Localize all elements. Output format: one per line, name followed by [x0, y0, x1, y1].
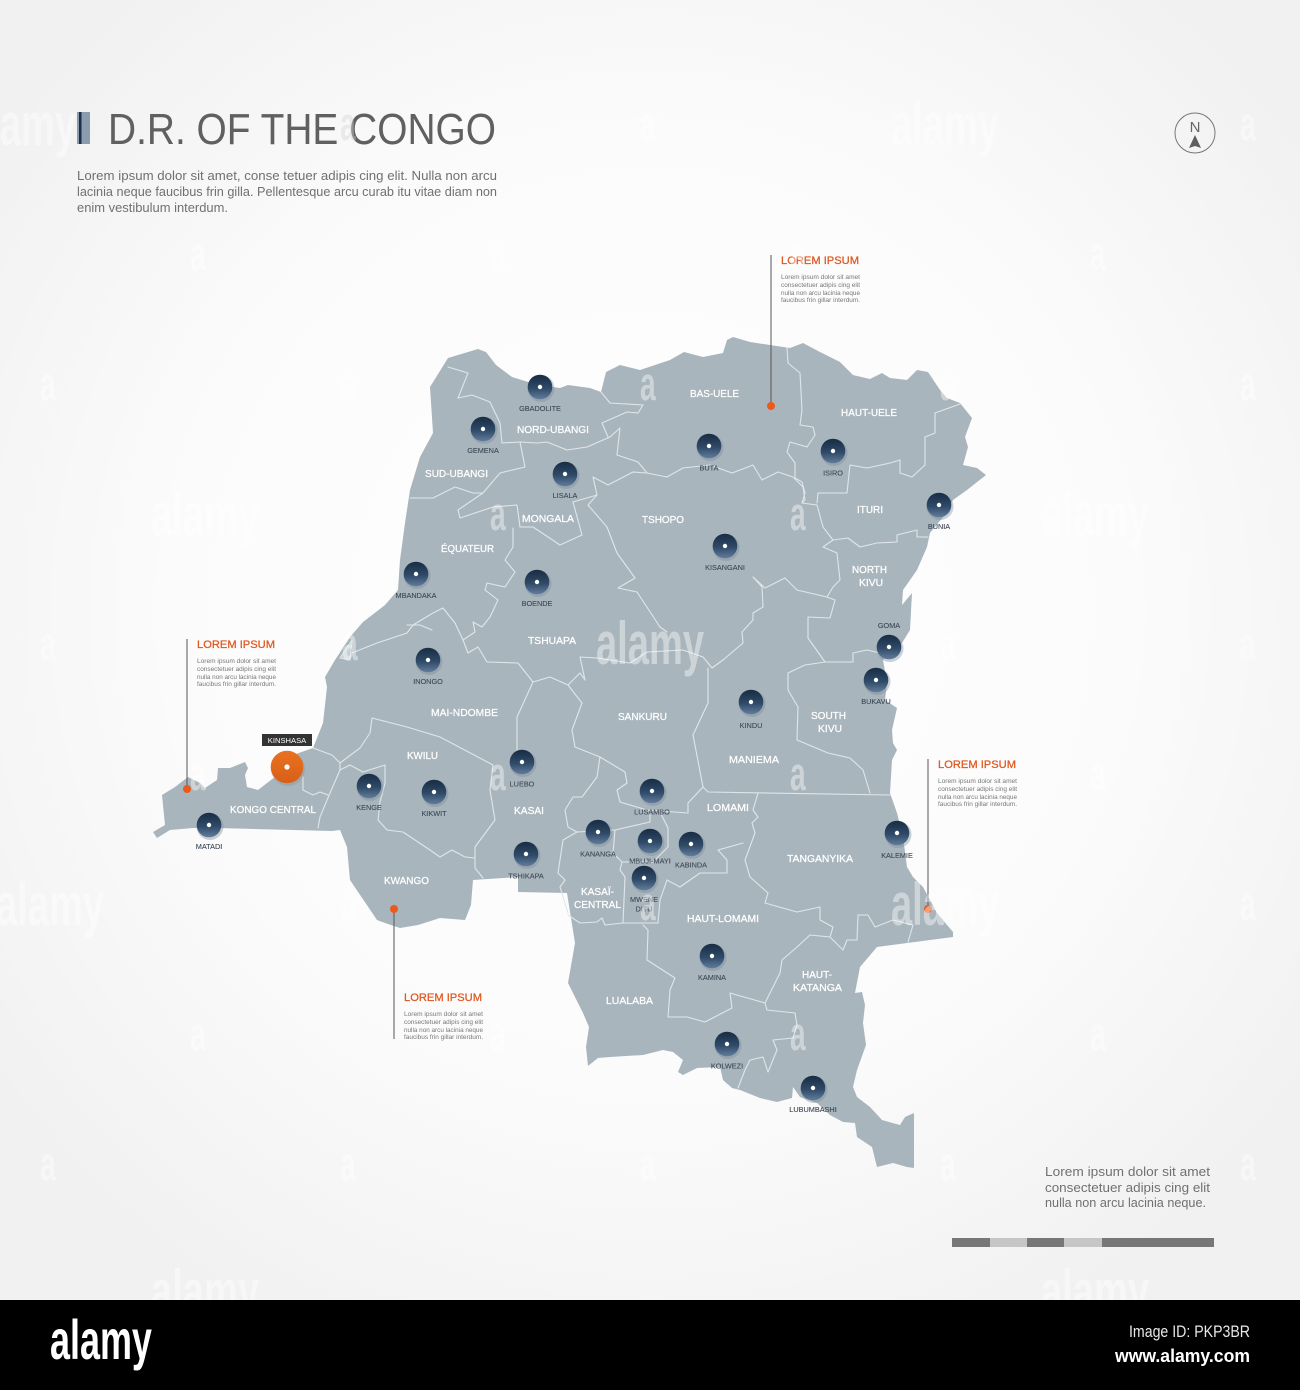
intro text: enim vestibulum interdum. — [77, 200, 228, 215]
watermarks: a — [790, 229, 806, 281]
city pin: Kenge — [356, 774, 384, 812]
footer bar — [0, 1300, 1300, 1390]
province borders — [303, 348, 960, 1088]
province labels: KWILU — [407, 750, 438, 762]
city pin: Mbandaka: MBANDAKA — [396, 591, 437, 600]
watermarks: a — [340, 99, 356, 151]
city pin: Lubumbashi — [789, 1076, 837, 1114]
watermarks: a — [640, 1139, 656, 1191]
note text: consectetuer adipis cing elit — [1045, 1180, 1210, 1195]
province labels — [230, 388, 897, 1007]
callout: west: consectetuer adipis cing elit — [197, 666, 276, 673]
watermarks: a — [490, 749, 506, 801]
callout: west: Lorem ipsum dolor sit amet — [197, 658, 276, 665]
intro text: Lorem ipsum dolor sit amet, conse tetuer adipis cing elit. Nulla non arcu — [77, 168, 497, 183]
city pin: Kindu — [738, 690, 766, 730]
city pin: Tshikapa: TSHIKAPA — [508, 872, 544, 880]
city pin: Kalemie — [881, 821, 913, 860]
watermarks: a — [40, 619, 56, 671]
province labels: MANIEMA — [729, 754, 779, 766]
watermarks: a — [190, 1009, 206, 1061]
callout: north: Lorem ipsum dolor sit amet — [781, 274, 860, 281]
watermarks: a — [340, 879, 356, 931]
city pin: Mwene-Ditu — [630, 866, 658, 914]
city pin: Bukavu: BUKAVU — [861, 697, 891, 706]
city pin: Lisala — [552, 462, 580, 500]
city pin: Bunia: BUNIA — [928, 522, 950, 531]
province labels: SANKURU — [618, 711, 667, 723]
callout: east: consectetuer adipis cing elit — [938, 786, 1017, 793]
map: D.R. Congo — [153, 337, 986, 1168]
watermarks: a — [790, 489, 806, 541]
icon: title bar — [77, 112, 90, 144]
city pin: Kalemie: KALEMIE — [881, 851, 913, 860]
watermarks: alamy — [891, 91, 999, 158]
city pin: Tshikapa — [508, 842, 544, 880]
city pin: Luebo: LUEBO — [510, 780, 535, 788]
callout: north — [767, 255, 860, 410]
watermarks: a — [940, 1139, 956, 1191]
heading: D.R. OF THE CONGO — [108, 105, 496, 154]
capital pin: Kinshasa — [262, 734, 312, 786]
intro text — [77, 168, 497, 215]
province labels: MAI-NDOMBE — [431, 707, 498, 719]
city pin: Isiro: ISIRO — [823, 468, 843, 478]
city pin: Kamina — [698, 944, 726, 982]
city pin: Kabinda: KABINDA — [675, 860, 707, 870]
city pin: Kenge: KENGE — [356, 803, 382, 812]
watermarks: alamy — [596, 610, 704, 677]
callout: east — [924, 759, 1017, 913]
city pin: Lisala: LISALA — [553, 491, 578, 500]
province labels: KASAÏ- — [581, 886, 614, 898]
watermarks: a — [1240, 619, 1256, 671]
province labels: KATANGA — [793, 982, 842, 994]
province labels: LOMAMI — [707, 802, 749, 814]
watermarks: a — [40, 359, 56, 411]
city pin: Goma: GOMA — [878, 621, 900, 630]
watermarks: a — [790, 1009, 806, 1061]
city pin: Gbadolite: GBADOLITE — [519, 404, 561, 413]
city pin: Matadi: MATADI — [196, 842, 222, 851]
note text: Lorem ipsum dolor sit amet — [1045, 1164, 1210, 1179]
footer logo: alamy — [50, 1308, 152, 1371]
city pin: Mbuji-Mayi — [629, 829, 671, 866]
province labels: TANGANYIKA — [787, 853, 853, 865]
watermarks: a — [490, 489, 506, 541]
image id: Image ID: PKP3BR — [1129, 1322, 1250, 1341]
watermarks: a — [790, 749, 806, 801]
watermarks: a — [190, 229, 206, 281]
watermarks: a — [1240, 879, 1256, 931]
city pin: Mbuji-Mayi: MBUJI-MAYI — [629, 856, 671, 866]
city pin: Gbadolite — [519, 375, 561, 413]
callout: south: LOREM IPSUM — [404, 992, 482, 1004]
watermarks: alamy — [891, 871, 999, 938]
title — [77, 105, 496, 154]
note text: nulla non arcu lacinia neque. — [1045, 1195, 1206, 1210]
watermarks: alamy — [151, 1258, 259, 1325]
watermarks: a — [1240, 99, 1256, 151]
callout: south: Lorem ipsum dolor sit amet — [404, 1011, 483, 1018]
city pin: Mwene-Ditu: DITU — [635, 904, 653, 914]
callout: west — [183, 639, 276, 793]
city pin: Buta — [696, 434, 724, 472]
city pin: Kikwit — [421, 780, 448, 818]
watermarks: a — [342, 619, 358, 671]
city pin: Kindu: KINDU — [740, 721, 762, 730]
callout: south: consectetuer adipis cing elit — [404, 1019, 483, 1026]
city pin: Kikwit: KIKWIT — [421, 809, 447, 818]
watermarks: a — [340, 1139, 356, 1191]
city pin: Mbandaka — [396, 562, 437, 600]
city pin: Lubumbashi: LUBUMBASHI — [789, 1105, 837, 1114]
watermarks: alamy — [1041, 1258, 1149, 1325]
province labels: HAUT-LOMAMI — [687, 913, 759, 925]
watermarks: a — [190, 749, 206, 801]
watermarks: a — [940, 359, 956, 411]
city pin: Bukavu — [861, 668, 891, 706]
province labels: TSHOPO — [642, 514, 684, 526]
city pin: Kisangani: KISANGANI — [705, 563, 745, 572]
callout: east: faucibus frin gillar interdum. — [938, 801, 1017, 808]
watermarks: a — [1240, 1139, 1256, 1191]
city pin: Kananga: KANANGA — [580, 850, 616, 858]
watermarks: alamy — [1041, 481, 1149, 548]
city pin: Kolwezi: KOLWEZI — [711, 1062, 743, 1070]
icon: compass: N — [1190, 119, 1200, 136]
callout: north: faucibus frin gillar interdum. — [781, 297, 860, 304]
city pin: Kabinda — [675, 832, 707, 870]
capital pin: Kinshasa: KINSHASA — [268, 736, 307, 745]
city pin: Matadi — [196, 813, 224, 851]
callout: east: LOREM IPSUM — [938, 759, 1016, 771]
website: www.alamy.com — [1114, 1346, 1250, 1366]
city pin: Mwene-Ditu: MWENE — [630, 895, 658, 904]
icon: compass — [1175, 113, 1215, 153]
callout: east: Lorem ipsum dolor sit amet — [938, 778, 1017, 785]
city pin: Lusambo: LUSAMBO — [634, 808, 670, 816]
province labels: CENTRAL — [574, 899, 621, 911]
callout: south: faucibus frin gillar interdum. — [404, 1034, 483, 1041]
province labels: KWANGO — [384, 875, 429, 887]
city pin: Goma — [876, 621, 904, 662]
watermarks: a — [1090, 749, 1106, 801]
province labels: HAUT- — [802, 969, 832, 981]
city pin: Luebo — [510, 750, 536, 788]
province labels: SUD-UBANGI — [425, 468, 488, 480]
province labels: BAS-UELE — [690, 388, 739, 400]
watermarks: a — [1090, 229, 1106, 281]
watermarks: a — [640, 359, 656, 411]
city pin: Kisangani — [705, 534, 745, 572]
province labels: KONGO CENTRAL — [230, 804, 316, 816]
province labels: NORD-UBANGI — [517, 424, 589, 436]
callout: west: LOREM IPSUM — [197, 639, 275, 651]
city pin: Bunia — [926, 493, 954, 531]
callout: north: nulla non arcu lacinia neque — [781, 290, 860, 297]
province labels: SOUTH — [811, 710, 846, 722]
city pin: Gemena — [467, 417, 499, 455]
watermarks: a — [490, 1009, 506, 1061]
city pin: Kananga — [580, 820, 616, 858]
callout: south: nulla non arcu lacinia neque — [404, 1027, 483, 1034]
watermarks: alamy — [151, 481, 259, 548]
city pin: Isiro — [820, 439, 848, 478]
province labels: ITURI — [857, 504, 883, 516]
city pin: Buta: BUTA — [700, 464, 719, 472]
city pin: Lusambo — [634, 779, 670, 816]
province labels: KASAI — [514, 805, 544, 817]
city pin: Gemena: GEMENA — [467, 446, 499, 455]
callout: north: consectetuer adipis cing elit — [781, 282, 860, 289]
city pin: Boende — [522, 570, 553, 608]
province labels: MONGALA — [522, 513, 574, 525]
province labels: NORTH — [852, 564, 887, 576]
province labels: HAUT-UELE — [841, 407, 897, 419]
callout: south — [390, 905, 483, 1041]
watermarks: a — [940, 619, 956, 671]
city pin: Kolwezi — [711, 1032, 743, 1070]
callout: east: nulla non arcu lacinia neque — [938, 794, 1017, 801]
watermarks: a — [640, 879, 656, 931]
province labels: LUALABA — [606, 995, 653, 1007]
city pin: Boende: BOENDE — [522, 599, 553, 608]
watermarks: a — [640, 99, 656, 151]
city pin: Inongo: INONGO — [413, 677, 443, 686]
note text — [1045, 1164, 1210, 1210]
province labels: KIVU — [859, 577, 883, 589]
province labels: TSHUAPA — [528, 635, 576, 647]
scale bar — [952, 1238, 1214, 1247]
watermarks: a — [340, 359, 356, 411]
city pin: Kamina: KAMINA — [698, 973, 726, 982]
callout: north: LOREM IPSUM — [781, 255, 859, 267]
callout: west: faucibus frin gillar interdum. — [197, 681, 276, 688]
watermarks: a — [40, 1139, 56, 1191]
watermarks: a — [1090, 1009, 1106, 1061]
city pin: Inongo — [413, 648, 443, 686]
province labels: ÉQUATEUR — [441, 542, 494, 555]
province labels: KIVU — [818, 723, 842, 735]
intro text: lacinia neque faucibus frin gilla. Pellentesque arcu curab itu vitae diam non — [77, 184, 497, 199]
watermarks: a — [1240, 359, 1256, 411]
country shape — [153, 337, 986, 1168]
watermarks: a — [490, 229, 506, 281]
callout: west: nulla non arcu lacinia neque — [197, 674, 276, 681]
